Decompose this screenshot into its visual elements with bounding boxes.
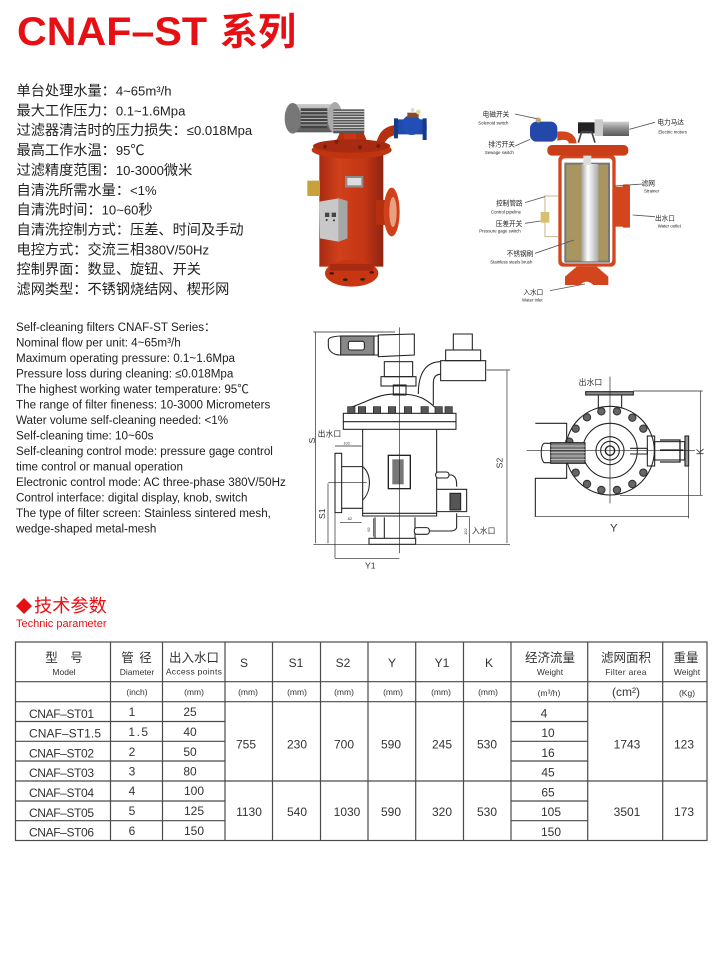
callout labels: Water inlet — [522, 298, 543, 303]
callout labels: Water outlet — [658, 224, 682, 229]
text block: English specifications — [15, 321, 286, 536]
table data values: 1 — [129, 705, 136, 719]
table data values: 10 — [541, 726, 555, 740]
table data values: 6 — [129, 824, 136, 838]
table header: S1 — [289, 656, 304, 670]
text block: English specifications: time control or manual operation — [16, 460, 183, 474]
table data values: 590 — [381, 805, 401, 819]
engineering drawing: side elevation: S1 — [317, 508, 327, 519]
table units row: (m³/h) — [538, 688, 560, 698]
table data values: 3501 — [614, 805, 641, 819]
table units row: (cm²) — [612, 685, 640, 699]
table data values: 100 — [184, 784, 204, 798]
table header: Filter area — [605, 667, 647, 677]
text block: Chinese specifications: 过滤精度范围：10-3000微米 — [16, 162, 192, 179]
filter cutaway body — [530, 117, 630, 285]
table data values: 80 — [183, 764, 197, 778]
table header: 型 号 — [45, 651, 83, 665]
table header: 出入水口 — [169, 651, 219, 665]
table header: S2 — [336, 656, 351, 670]
text block: Chinese specifications: 控制界面：数显、旋钮、开关 — [16, 262, 201, 278]
text block: Chinese specifications: 电控方式：交流三相380V/50Hz — [16, 241, 209, 258]
table header: Weight — [674, 667, 701, 677]
text block: English specifications: wedge-shaped metal-mesh — [15, 522, 156, 536]
engineering drawing: top view: K — [695, 448, 706, 455]
table units row: (mm) — [334, 687, 354, 697]
table model column — [29, 707, 101, 840]
callout labels: Pressure gage switch — [479, 228, 521, 233]
table model column: CNAF–ST06 — [29, 826, 94, 840]
engineering drawing: side elevation — [307, 327, 510, 570]
callout labels: Strainer — [644, 188, 660, 193]
table model column: CNAF–ST04 — [29, 786, 94, 800]
table data values: 150 — [541, 825, 561, 839]
table header: K — [485, 656, 493, 670]
text block: English specifications: The range of filter fineness: 10-3000 Micrometers — [16, 398, 270, 412]
table units row: (mm) — [184, 687, 204, 697]
callout labels: 控制管路 — [496, 199, 523, 208]
table data values: 25 — [183, 705, 197, 719]
table data values: 40 — [183, 725, 197, 739]
text block: English specifications: Pressure loss during cleaning: ≤0.018Mpa — [16, 368, 234, 380]
table data values: 1030 — [334, 805, 361, 819]
table model column: CNAF–ST03 — [29, 766, 94, 780]
table header: Weight — [537, 667, 564, 677]
table data values: 755 — [236, 738, 256, 752]
table header: S — [240, 656, 248, 670]
text block: Chinese specifications: 单台处理水量：4~65m³/h — [16, 84, 172, 100]
engineering drawing: side elevation: 82 — [348, 516, 353, 521]
engineering drawing: top view: Y — [610, 523, 618, 535]
callout labels — [478, 109, 687, 303]
table data values: 65 — [541, 786, 555, 800]
table header: Y1 — [435, 656, 450, 670]
table data values: 5 — [129, 804, 136, 818]
table data values: 4 — [129, 784, 136, 798]
table data values: 3 — [129, 764, 136, 778]
table data values: 45 — [541, 766, 555, 780]
table units row: (mm) — [431, 687, 451, 697]
callout labels: Solenoid switch — [478, 120, 509, 125]
product photo: self-cleaning filter — [285, 102, 427, 287]
table units row: (mm) — [478, 687, 498, 697]
text block: Chinese specifications: 自清洗时间：10~60秒 — [16, 203, 153, 219]
text block: English specifications: The type of filter screen: Stainless sintered mesh, — [16, 507, 271, 520]
engineering drawing: side elevation: S2 — [495, 458, 505, 468]
table header: 管 径 — [121, 650, 153, 665]
callout labels: 出水口 — [655, 214, 675, 223]
table grid — [16, 642, 707, 840]
text block: Chinese specifications — [16, 84, 253, 298]
table data values: 230 — [287, 738, 307, 752]
text block: English specifications: Self-cleaning filters CNAF-ST Series： — [16, 321, 216, 334]
icon: red diamond — [16, 598, 32, 614]
table data values: 125 — [184, 804, 204, 818]
engineering drawing: side elevation: 102 — [463, 528, 468, 535]
table data values: 16 — [541, 746, 555, 760]
section heading: technical parameters — [16, 596, 107, 630]
callout labels: 排污开关 — [488, 140, 515, 149]
text block: Chinese specifications: 最大工作压力：0.1~1.6Mpa — [16, 103, 186, 119]
title: CNAF–ST — [17, 10, 207, 54]
table data values: 105 — [541, 805, 561, 819]
table header: 滤网面积 — [601, 651, 651, 665]
text block: English specifications: The highest working water temperature: 95℃ — [16, 383, 249, 396]
callout labels: Control pipeline — [491, 209, 522, 214]
table header: Model — [52, 667, 76, 677]
table data values: 245 — [432, 738, 452, 752]
table units row: (mm) — [287, 687, 307, 697]
engineering drawing: side elevation: 102 — [343, 440, 351, 445]
callout leader lines — [515, 114, 655, 291]
callout labels: Sewage switch — [485, 150, 514, 155]
table header: Access points — [166, 666, 222, 676]
table data values: 2 — [129, 745, 136, 759]
table data values: 590 — [381, 738, 401, 752]
text block: English specifications: Nominal flow per unit: 4~65m³/h — [16, 336, 181, 350]
table units row — [126, 685, 695, 699]
callout labels: 入水口 — [523, 287, 543, 296]
engineering drawing: side elevation: 出水口 — [318, 429, 341, 439]
text block: Chinese specifications: 自清洗控制方式：压差、时间及手动 — [16, 222, 244, 238]
engineering drawing: side elevation: 82 — [366, 526, 371, 532]
section heading: technical parameters: Technic parameter — [16, 618, 107, 630]
table data values: 530 — [477, 805, 497, 819]
text block: English specifications: Self-cleaning control mode: pressure gage control — [16, 445, 273, 458]
text block: Chinese specifications: 最高工作水温：95℃ — [16, 142, 145, 159]
table header: Y — [388, 656, 396, 670]
table data values: 123 — [674, 738, 694, 752]
cutaway diagram with callouts — [478, 109, 687, 303]
table data values: 1.5 — [128, 725, 150, 739]
table model column: CNAF–ST05 — [29, 806, 94, 820]
title: 系列 — [220, 12, 296, 54]
table: technical parameters — [16, 642, 707, 840]
table model column: CNAF–ST01 — [29, 707, 94, 721]
table header — [45, 650, 701, 677]
section heading: technical parameters: 技术参数 — [34, 596, 107, 616]
table data values: 540 — [287, 805, 307, 819]
table units row: (inch) — [126, 687, 148, 697]
table units row: (mm) — [238, 687, 258, 697]
table model column: CNAF–ST1.5 — [29, 726, 101, 740]
table data values: 1130 — [236, 805, 262, 819]
table data values: 173 — [674, 805, 694, 819]
table units row: (mm) — [383, 687, 403, 697]
text block: Chinese specifications: 自清洗所需水量：<1% — [16, 183, 157, 199]
callout labels: 滤网 — [642, 178, 655, 187]
text block: English specifications: Maximum operating pressure: 0.1~1.6Mpa — [16, 352, 236, 365]
table data values: 150 — [184, 824, 204, 838]
engineering drawing: top view — [527, 377, 706, 535]
text block: English specifications: Control interface: digital display, knob, switch — [16, 492, 247, 504]
callout labels: 不锈钢刷 — [507, 249, 534, 258]
text block: English specifications: Electronic control mode: AC three-phase 380V/50Hz — [16, 476, 286, 489]
table data values: 530 — [477, 738, 497, 752]
engineering drawing: top view: 出水口 — [579, 377, 602, 387]
callout labels: 电磁开关 — [483, 109, 510, 118]
table data values: 1743 — [614, 738, 641, 752]
text block: English specifications: Water volume self-cleaning needed: <1% — [16, 414, 228, 427]
table header: Diameter — [120, 667, 154, 677]
table data values — [128, 705, 694, 839]
table data values: 320 — [432, 805, 452, 819]
table data values: 700 — [334, 738, 354, 752]
title — [17, 10, 296, 54]
table model column: CNAF–ST02 — [29, 746, 94, 760]
text block: Chinese specifications: 滤网类型：不锈钢烧结网、楔形网 — [16, 282, 229, 298]
callout labels: 压差开关 — [496, 219, 523, 228]
callout labels: 电力马达 — [657, 118, 684, 127]
table data values: 50 — [183, 745, 197, 759]
text block: Chinese specifications: 过滤器清洁时的压力损失：≤0.018Mpa — [16, 123, 253, 139]
callout labels: Electric motors — [658, 129, 687, 134]
table header: 经济流量 — [525, 650, 575, 665]
text block: English specifications: Self-cleaning time: 10~60s — [16, 430, 154, 442]
engineering drawing: side elevation: Y1 — [365, 560, 376, 570]
engineering drawing: side elevation: S — [307, 437, 317, 443]
callout labels: Stainless steels brush — [490, 259, 533, 264]
table units row: (Kg) — [679, 688, 695, 698]
engineering drawing: side elevation: 入水口 — [472, 525, 495, 535]
table data values: 4 — [541, 706, 548, 720]
table header: 重量 — [673, 650, 699, 665]
